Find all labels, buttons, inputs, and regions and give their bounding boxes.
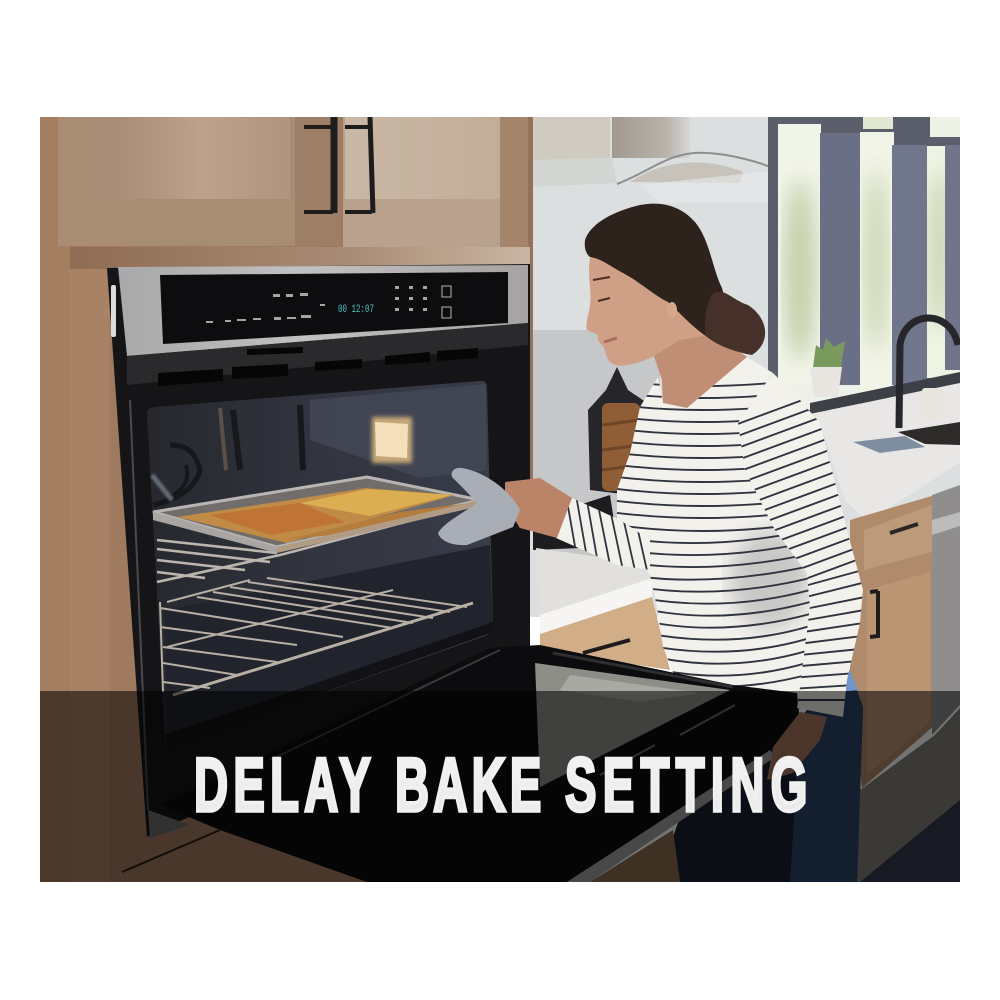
oven body — [107, 264, 540, 837]
woman: neck and face — [586, 250, 747, 408]
lower oven rack — [160, 578, 473, 695]
woman: ear — [667, 302, 677, 318]
air fry tray with food — [153, 477, 480, 553]
cabinet band above oven — [70, 247, 530, 269]
woman: hair — [585, 204, 765, 355]
tall wood cabinet — [70, 117, 367, 882]
cutting board — [588, 367, 644, 494]
title — [194, 744, 807, 828]
bottom cabinet diagonal — [122, 830, 220, 872]
dark banner overlay — [40, 691, 960, 882]
marble backsplash — [533, 330, 660, 580]
upper oven rack — [156, 520, 416, 584]
oven frame highlights — [130, 400, 148, 810]
kitchen wall — [528, 117, 960, 617]
cooktop edge — [533, 495, 614, 550]
oven light — [372, 417, 412, 463]
oven frame reflection — [127, 323, 528, 385]
title: DELAY — [194, 744, 371, 828]
title: SETTING — [565, 744, 807, 828]
faucet — [899, 318, 958, 428]
title: BAKE — [395, 744, 541, 828]
lower cabinet left of woman — [540, 597, 670, 670]
woman: right arm and cuff — [735, 373, 870, 717]
towel — [853, 436, 925, 453]
countertop — [810, 383, 960, 522]
photo: woman using wall oven in kitchen — [40, 117, 960, 882]
woman: hair bun — [705, 292, 765, 355]
oven cavity — [147, 381, 493, 748]
floor — [852, 708, 960, 882]
lower wood behind door handle — [590, 830, 680, 882]
woman: far hand on door — [767, 712, 827, 780]
open oven door — [147, 645, 800, 882]
oven control panel — [111, 265, 528, 356]
woman: left sleeve — [556, 498, 650, 570]
upper cabinet doors — [58, 117, 528, 247]
lower cabinets right — [850, 485, 960, 788]
rug — [860, 800, 960, 882]
lower counter — [536, 548, 652, 634]
window — [768, 117, 960, 414]
cabinet handles — [304, 117, 373, 213]
sink — [898, 422, 960, 445]
range hood — [533, 117, 768, 186]
soap bottle — [922, 388, 936, 391]
oven control panel: 00 12:07 — [338, 304, 374, 316]
near hand holding mitt — [505, 478, 572, 538]
woman: striped shirt body — [610, 357, 810, 700]
oven mitt — [438, 468, 520, 545]
plant — [810, 338, 845, 397]
oven vents — [158, 347, 478, 386]
woman: jeans — [673, 663, 863, 882]
